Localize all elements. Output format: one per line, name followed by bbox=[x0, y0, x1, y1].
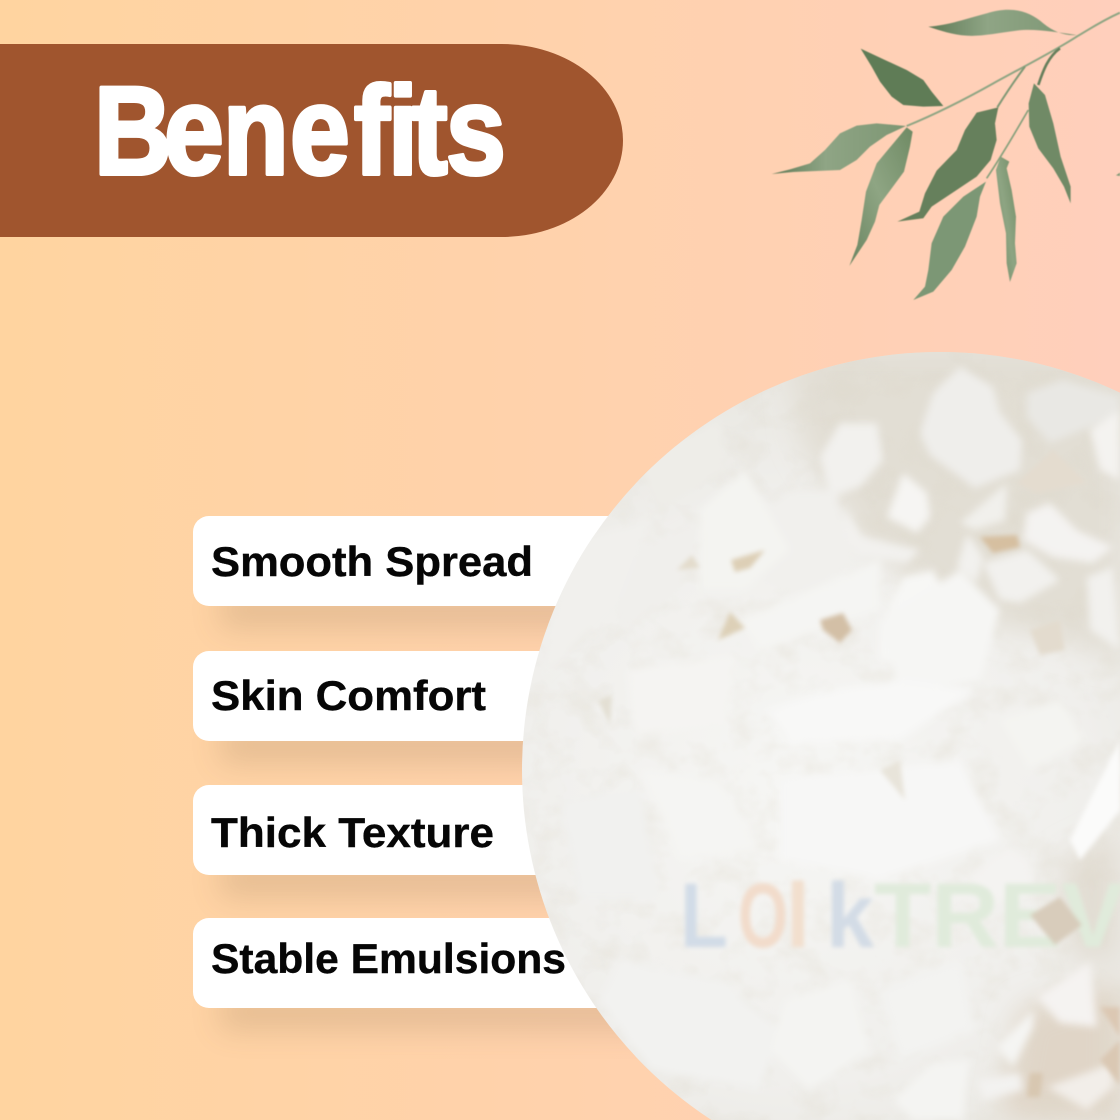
watermark: TREV bbox=[874, 865, 1120, 967]
product photo circle: white flakes bbox=[522, 352, 1120, 1120]
watermark: l bbox=[786, 865, 810, 967]
label: Stable Emulsions: Stable Emulsions bbox=[211, 935, 566, 982]
upper right flakes bbox=[920, 367, 1022, 488]
watermark bbox=[684, 879, 1118, 950]
watermark: k bbox=[826, 865, 875, 967]
benefit card: Stable Emulsions bbox=[193, 918, 793, 1008]
benefit card: Thick Texture bbox=[193, 785, 793, 875]
benefit card: Skin Comfort bbox=[193, 651, 793, 741]
centre flakes bbox=[902, 570, 1001, 680]
icon: eucalyptus branch bbox=[772, 9, 1120, 300]
bright flake, right edge bbox=[1070, 740, 1120, 860]
watermark: L bbox=[680, 865, 728, 967]
label: Skin Comfort: Skin Comfort bbox=[211, 672, 486, 719]
label: Thick Texture: Thick Texture bbox=[211, 809, 494, 856]
heading: Benefits: Benefits bbox=[94, 60, 506, 201]
benefit card: Smooth Spread bbox=[193, 516, 793, 606]
title banner bbox=[0, 44, 623, 237]
tan specks bbox=[980, 535, 1020, 553]
label: Smooth Spread: Smooth Spread bbox=[211, 538, 533, 585]
watermark: O bbox=[738, 865, 788, 967]
lower flakes bbox=[974, 862, 1024, 886]
